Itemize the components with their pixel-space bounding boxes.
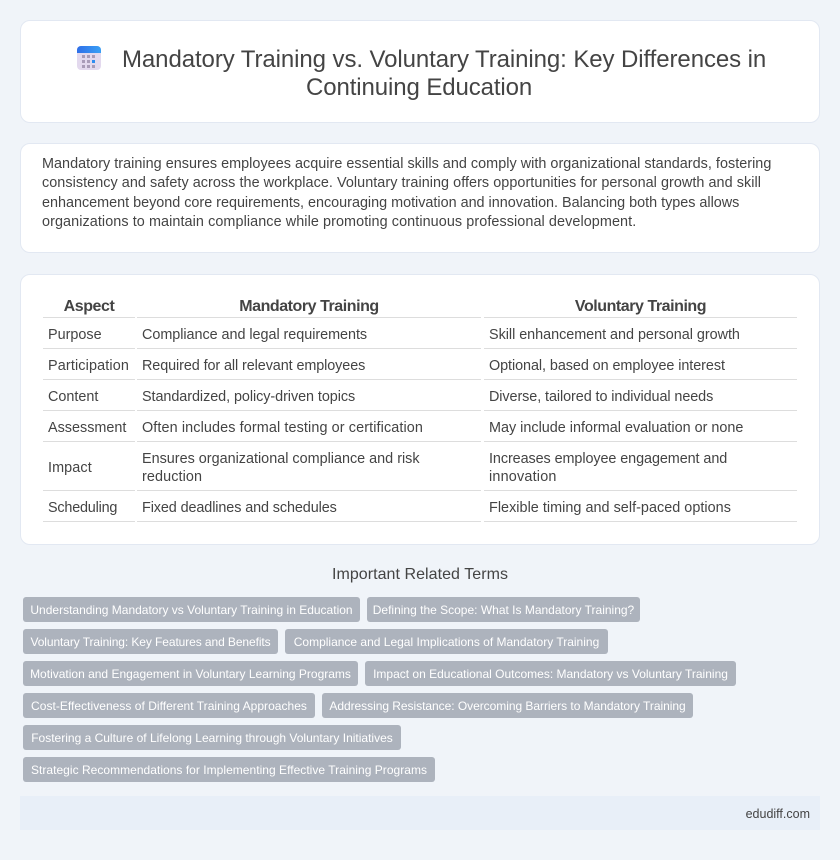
footer text: edudiff.com <box>746 807 810 821</box>
related terms tags: Motivation and Engagement in Voluntary Learning Programs <box>30 667 351 681</box>
related terms tags <box>23 597 736 782</box>
table: reduction <box>142 469 202 485</box>
intro text: Mandatory training ensures employees acquire essential skills and comply with organizational standards, fostering <box>42 156 771 172</box>
table: May include informal evaluation or none <box>489 420 743 436</box>
table: Fixed deadlines and schedules <box>142 500 337 516</box>
intro text <box>42 156 771 230</box>
table: Impact <box>48 460 92 476</box>
table <box>43 298 797 522</box>
related terms tags: Strategic Recommendations for Implementing Effective Training Programs <box>31 763 427 777</box>
table: Mandatory Training <box>239 298 379 315</box>
intro text: enhancement beyond core requirements, encouraging motivation and innovation. Balancing both types allows <box>42 195 739 211</box>
related terms tags: Understanding Mandatory vs Voluntary Training in Education <box>30 603 353 617</box>
footer bar <box>20 796 820 830</box>
title: Continuing Education <box>306 74 532 101</box>
related terms tags: Fostering a Culture of Lifelong Learning through Voluntary Initiatives <box>31 731 393 745</box>
related terms tags: Defining the Scope: What Is Mandatory Training? <box>373 603 634 617</box>
table: Standardized, policy-driven topics <box>142 389 355 405</box>
table: Voluntary Training <box>575 298 706 315</box>
table: Assessment <box>48 420 126 436</box>
panel: header <box>20 20 820 123</box>
related terms tags: Impact on Educational Outcomes: Mandatory vs Voluntary Training <box>373 667 728 681</box>
table: Purpose <box>48 327 102 343</box>
related terms tags: Compliance and Legal Implications of Mandatory Training <box>294 635 599 649</box>
table: Scheduling <box>48 500 117 516</box>
table: Often includes formal testing or certification <box>142 420 423 436</box>
table: Content <box>48 389 98 405</box>
table: Diverse, tailored to individual needs <box>489 389 713 405</box>
table: Required for all relevant employees <box>142 358 365 374</box>
title: Mandatory Training vs. Voluntary Training: Key Differences in <box>122 46 766 73</box>
table: Participation <box>48 358 129 374</box>
intro text: organizations to maintain compliance while promoting continuous professional development. <box>42 214 636 230</box>
icon: calendar <box>77 46 101 70</box>
related terms tags: Voluntary Training: Key Features and Benefits <box>30 635 271 649</box>
related terms heading: Important Related Terms <box>332 566 508 583</box>
table: Skill enhancement and personal growth <box>489 327 740 343</box>
table: Optional, based on employee interest <box>489 358 725 374</box>
panel: intro <box>20 143 820 253</box>
related terms tags: Addressing Resistance: Overcoming Barriers to Mandatory Training <box>329 699 686 713</box>
table: Compliance and legal requirements <box>142 327 367 343</box>
table: innovation <box>489 469 557 485</box>
title <box>122 46 766 101</box>
table: Increases employee engagement and <box>489 451 727 467</box>
table: Flexible timing and self-paced options <box>489 500 731 516</box>
table: Ensures organizational compliance and risk <box>142 451 420 467</box>
table: Aspect <box>64 298 114 315</box>
intro text: consistency and safety across the workplace. Voluntary training offers opportunities for personal growth and skill <box>42 175 761 191</box>
panel: comparison table <box>20 274 820 545</box>
related terms tags: Cost-Effectiveness of Different Training Approaches <box>31 699 307 713</box>
